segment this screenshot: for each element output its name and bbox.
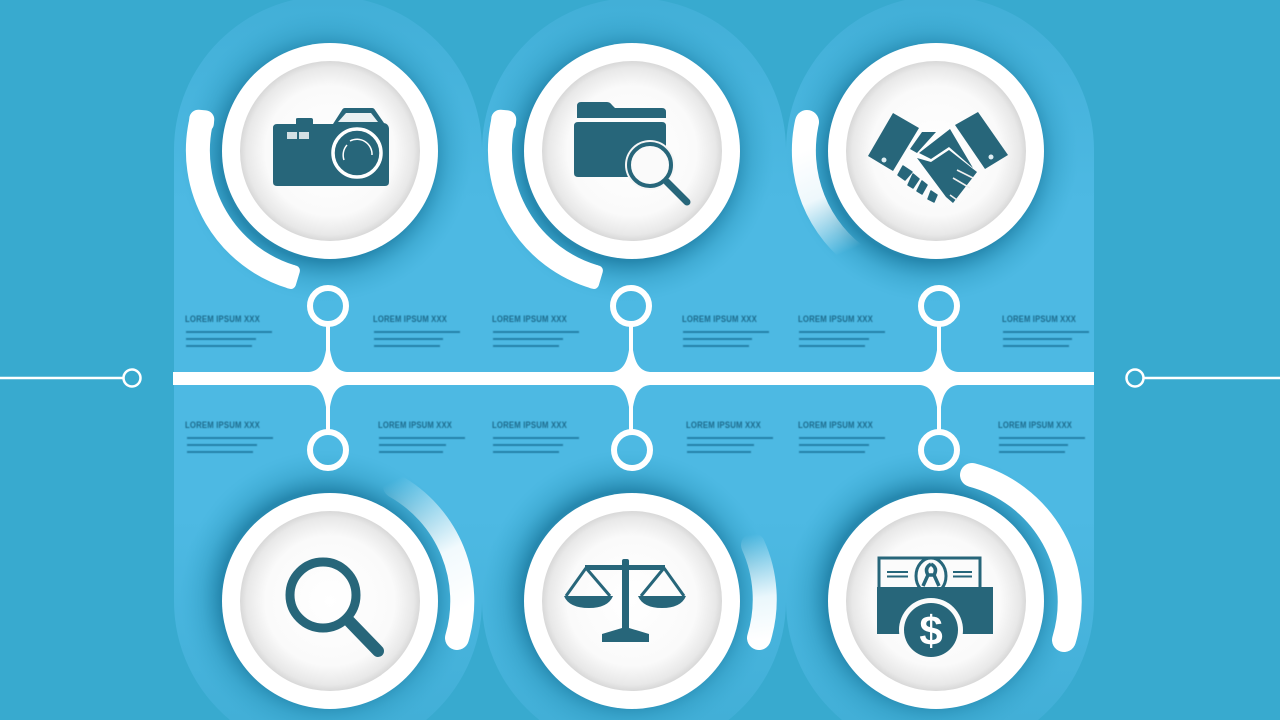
- icon: handshake: [868, 112, 1008, 203]
- timeline ring bottom 1: [310, 432, 346, 468]
- icon: banknote and coin: $: [919, 607, 943, 654]
- panel: column two: [482, 0, 786, 720]
- right connector line and ring: [1126, 370, 1280, 386]
- icon: scales of justice: [564, 559, 686, 642]
- icon: magnifier: [290, 562, 378, 651]
- text block bottom 1 right: LOREM IPSUM XXX: [378, 420, 452, 430]
- shadow halo: money node: [786, 450, 1078, 720]
- node: camera: [188, 43, 438, 290]
- node: handshake: [804, 43, 1044, 260]
- central timeline with junctions: [173, 326, 1094, 431]
- node: scales: [524, 493, 765, 709]
- panel: column three: [786, 0, 1094, 720]
- panel: column one: [174, 0, 482, 720]
- node: folder search: [490, 43, 740, 290]
- text block top 1 left: LOREM IPSUM XXX: [185, 314, 260, 324]
- text block top 2 right: LOREM IPSUM XXX: [682, 314, 757, 324]
- text block bottom 2 left: LOREM IPSUM XXX: [492, 420, 567, 430]
- text block top 3 left: LOREM IPSUM XXX: [798, 314, 873, 324]
- text block bottom 2 right: LOREM IPSUM XXX: [686, 420, 761, 430]
- text block bottom 2 right: [686, 420, 773, 452]
- text block bottom 3 right: LOREM IPSUM XXX: [998, 420, 1072, 430]
- shadow halo: magnifier node: [180, 450, 472, 720]
- arc: handshake progress: [804, 122, 862, 260]
- text block top 1 right: [373, 314, 460, 346]
- text block bottom 3 left: LOREM IPSUM XXX: [798, 420, 873, 430]
- icon: camera: [273, 108, 389, 186]
- node: magnifier: [222, 486, 462, 709]
- shadow halo: folder node: [482, 10, 774, 302]
- text block top 2 left: LOREM IPSUM XXX: [492, 314, 567, 324]
- arc: scales progress: [753, 545, 765, 638]
- text block top 3 right: [1002, 314, 1089, 346]
- text block bottom 3 right: [998, 420, 1085, 452]
- timeline ring bottom 3: [921, 432, 957, 468]
- text block top 2 right: [682, 314, 769, 346]
- icon: banknote and coin: [877, 558, 993, 662]
- node: money: [828, 475, 1070, 709]
- shadow halo: camera node: [180, 10, 472, 302]
- text block bottom 1 right: [378, 420, 465, 452]
- text block bottom 3 left: [798, 420, 885, 452]
- icon: folder with magnifier: [574, 102, 687, 202]
- timeline ring top 2: [613, 288, 649, 324]
- text block bottom 1 left: [185, 420, 273, 452]
- text block bottom 2 left: [492, 420, 579, 452]
- text block top 2 left: [492, 314, 579, 346]
- arc: money progress: [972, 475, 1070, 640]
- shadow halo: handshake node: [786, 10, 1078, 302]
- timeline ring top 1: [310, 288, 346, 324]
- arc: camera progress: [188, 109, 301, 290]
- arc: magnifier progress: [395, 486, 462, 638]
- text block top 3 left: [798, 314, 885, 346]
- shadow halo: scales node: [482, 450, 774, 720]
- timeline ring top 3: [921, 288, 957, 324]
- timeline ring bottom 2: [614, 432, 650, 468]
- text block top 3 right: LOREM IPSUM XXX: [1002, 314, 1076, 324]
- text block bottom 1 left: LOREM IPSUM XXX: [185, 420, 260, 430]
- arc: folder progress: [490, 109, 604, 290]
- text block top 1 right: LOREM IPSUM XXX: [373, 314, 447, 324]
- text block top 1 left: [185, 314, 272, 346]
- left connector line and ring: [0, 370, 140, 386]
